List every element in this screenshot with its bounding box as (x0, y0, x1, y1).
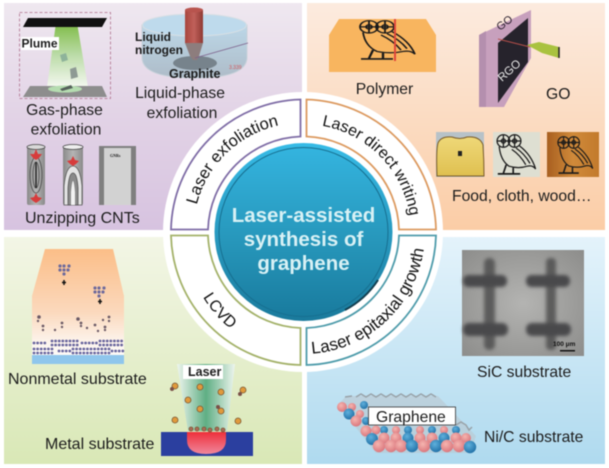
central diagram (162, 92, 444, 372)
icon: GO board with laser: RGO (496, 58, 524, 84)
label: LCVD: LCVD (203, 292, 236, 328)
panel: laser direct writing (307, 3, 605, 230)
heading: GO: GO (546, 86, 570, 103)
icon: liquid-phase exfoliation setup: 3.339 (229, 65, 242, 71)
heading: gas-phase exfoliation: Gas-phase (26, 102, 103, 119)
center disc (214, 143, 392, 321)
icon: polymer owl (329, 19, 436, 72)
icon: nonmetal substrate growth (32, 249, 124, 364)
icon: liquid-phase exfoliation setup: nitrogen (135, 43, 183, 57)
photo: SiC SEM image (462, 250, 584, 356)
photo: cloth owl (493, 132, 540, 177)
heading: gas-phase exfoliation: exfoliation (31, 122, 101, 138)
icon: GO board with laser: GO (494, 13, 516, 33)
label: laser direct writing: Laser direct writing (322, 114, 419, 216)
icon: liquid-phase exfoliation setup: Graphite (169, 67, 220, 81)
icon: gas-phase exfoliation setup (20, 12, 110, 98)
heading: polymer: Polymer (356, 81, 413, 98)
icon: Ni/C atomic lattice with graphene: Graphene (376, 409, 446, 426)
panel: laser exfoliation (4, 3, 302, 230)
heading: Ni/C substrate: Ni/C substrate (484, 429, 584, 446)
icon: unzipping CNT tubes (27, 144, 136, 205)
heading: SiC substrate: SiC substrate (477, 364, 571, 381)
icon: metal substrate laser (161, 364, 253, 456)
icon: metal substrate laser: Laser (188, 365, 221, 379)
label: laser exfoliation: Laser exfoliation (186, 116, 278, 204)
heading: nonmetal substrate: Nonmetal substrate (8, 371, 147, 388)
heading: unzipping CNTs: Unzipping CNTs (25, 210, 140, 227)
panel: LCVD (4, 237, 302, 464)
photo: bread (436, 132, 484, 177)
icon: liquid-phase exfoliation setup (135, 8, 248, 81)
icon: Ni/C atomic lattice with graphene (337, 394, 476, 453)
photo: wood owl (547, 132, 599, 177)
photo: SiC SEM image: 100 μm (553, 341, 576, 348)
icon: GO board with laser (479, 10, 559, 107)
center title: Laser-assisted (232, 204, 375, 227)
heading: liquid-phase exfoliation: Liquid-phase (135, 85, 225, 102)
panel: laser epitaxial growth (307, 237, 605, 464)
center title: graphene (257, 252, 350, 275)
label: laser epitaxial growth: Laser epitaxial growth (311, 248, 424, 354)
center title: synthesis of (244, 228, 363, 251)
icon: gas-phase exfoliation setup: Plume (22, 36, 58, 50)
heading: food, cloth, wood: Food, cloth, wood… (452, 188, 592, 205)
heading: liquid-phase exfoliation: exfoliation (147, 105, 217, 122)
icon: unzipping CNT tubes: GNRs (110, 153, 121, 158)
icon: liquid-phase exfoliation setup: Liquid (135, 30, 171, 44)
heading: metal substrate: Metal substrate (45, 436, 154, 453)
